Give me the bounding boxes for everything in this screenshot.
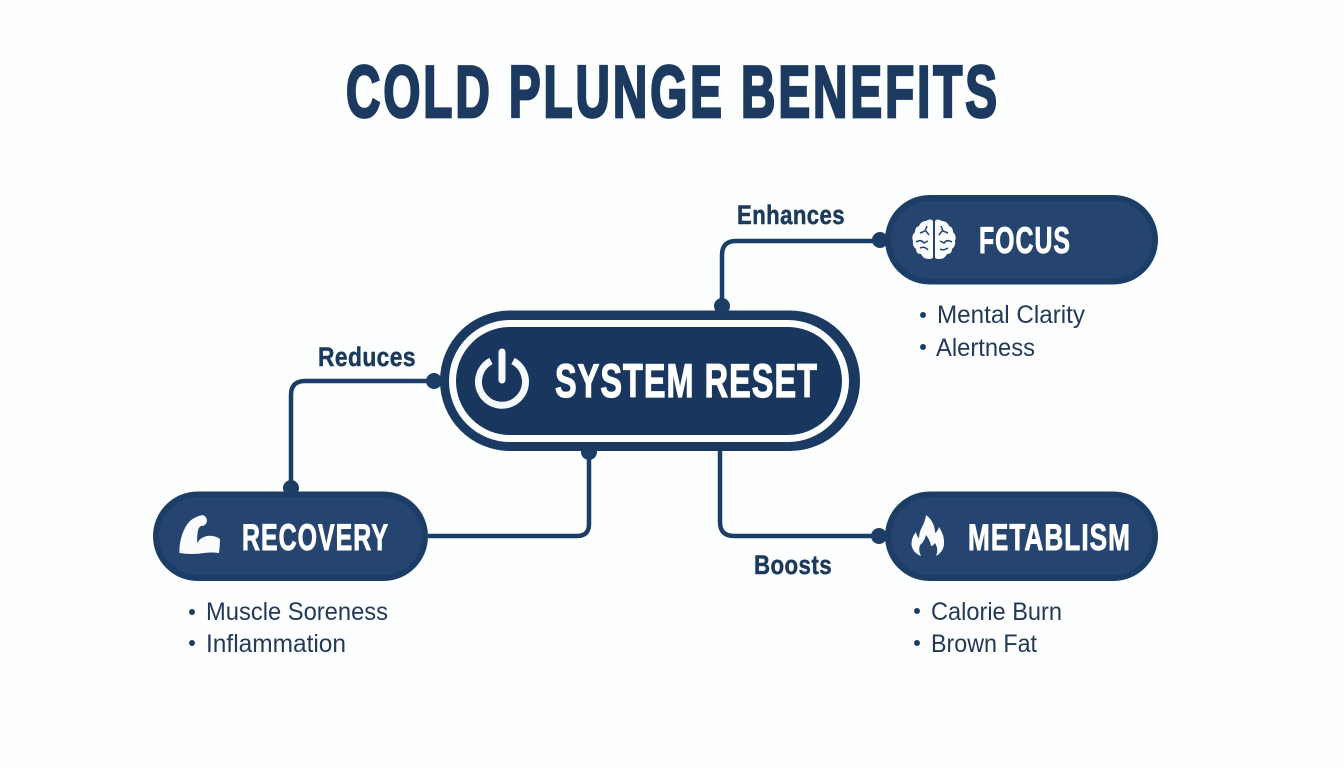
- list: recovery details: [189, 598, 388, 658]
- arrow: recovery to system reset: [428, 444, 597, 536]
- panel: system reset: [440, 310, 860, 451]
- heading: system reset: SYSTEM RESET: [555, 354, 818, 407]
- arrow: system reset to recovery: [283, 373, 442, 496]
- icon: brain: [912, 220, 956, 259]
- icon: power: [478, 352, 526, 405]
- icon: muscle: [179, 515, 220, 554]
- heading: recovery: RECOVERY: [242, 517, 389, 558]
- arrow: system reset to focus: [714, 232, 888, 314]
- label: Boosts: Boosts: [754, 550, 832, 580]
- list: metabolism details: Calorie Burn: [931, 598, 1062, 626]
- panel: metabolism: [885, 492, 1158, 581]
- icon: flame: [911, 515, 944, 556]
- list: recovery details: Inflammation: [206, 630, 346, 658]
- panel: focus: [885, 195, 1158, 284]
- list: focus details: Alertness: [936, 334, 1035, 362]
- list: recovery details: Muscle Soreness: [206, 598, 388, 626]
- arrow: system reset to metabolism: [720, 451, 887, 544]
- list: metabolism details: Brown Fat: [931, 630, 1037, 658]
- label: Enhances: Enhances: [737, 200, 845, 230]
- list: focus details: [920, 301, 1085, 362]
- label: Reduces: Reduces: [318, 342, 416, 372]
- title: COLD PLUNGE BENEFITS: [346, 52, 1000, 133]
- panel: recovery: [153, 492, 428, 581]
- list: focus details: Mental Clarity: [937, 301, 1085, 329]
- heading: metabolism: METABLISM: [968, 517, 1131, 558]
- heading: focus: FOCUS: [979, 220, 1071, 261]
- list: metabolism details: [914, 598, 1062, 658]
